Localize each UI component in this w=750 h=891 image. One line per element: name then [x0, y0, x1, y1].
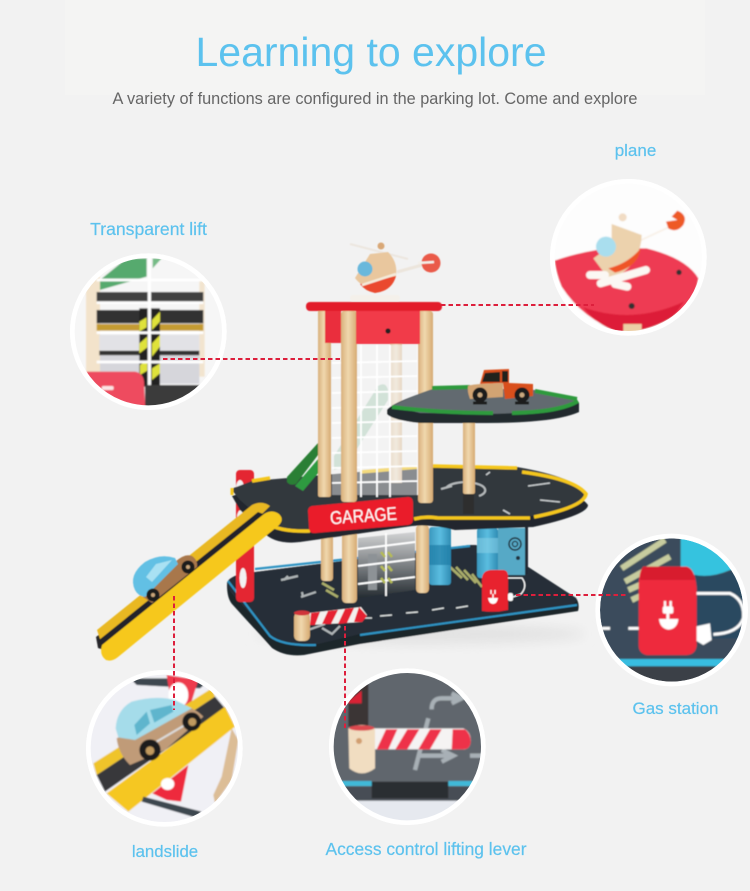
connector: lift — [163, 358, 340, 360]
circle: plane — [550, 179, 706, 336]
connector: lever — [344, 626, 346, 728]
title: Learning to explore — [195, 29, 547, 75]
truck — [468, 369, 533, 403]
barrier gate — [294, 607, 367, 641]
garage sign — [308, 497, 413, 533]
garage sign: GARAGE — [329, 503, 398, 528]
circle: landslide — [86, 670, 242, 826]
subtitle: A variety of functions are configured in the parking lot. Come and explore — [113, 90, 637, 108]
roof and red panel — [306, 302, 442, 344]
ground floor grid and lower posts — [321, 525, 528, 603]
label: landslide: landslide — [132, 842, 198, 861]
dashed connector lines — [163, 305, 627, 728]
label: gas station: Gas station — [632, 699, 718, 718]
label: access control lifting lever: Access control lifting lever — [325, 839, 527, 859]
green ramp — [287, 384, 388, 491]
ground floor board — [227, 545, 579, 655]
label: plane: plane — [615, 141, 656, 160]
middle deck — [231, 466, 588, 543]
label: transparent lift: Transparent lift — [90, 219, 207, 239]
circle: access control lever — [329, 668, 486, 825]
upper deck — [387, 387, 579, 423]
red gas pump — [482, 570, 525, 612]
connector: landslide — [173, 596, 175, 710]
ground shadow — [255, 624, 585, 644]
toy garage illustration — [96, 242, 588, 661]
title band — [65, 0, 705, 95]
red sign post — [236, 470, 254, 602]
connector: plane — [441, 304, 594, 306]
circle: gas station — [596, 534, 748, 686]
connector: gas station — [516, 594, 627, 596]
tower posts — [318, 310, 475, 503]
helicopter — [350, 242, 440, 301]
circle: transparent lift — [70, 254, 226, 410]
yellow slide with blue car — [96, 503, 282, 661]
